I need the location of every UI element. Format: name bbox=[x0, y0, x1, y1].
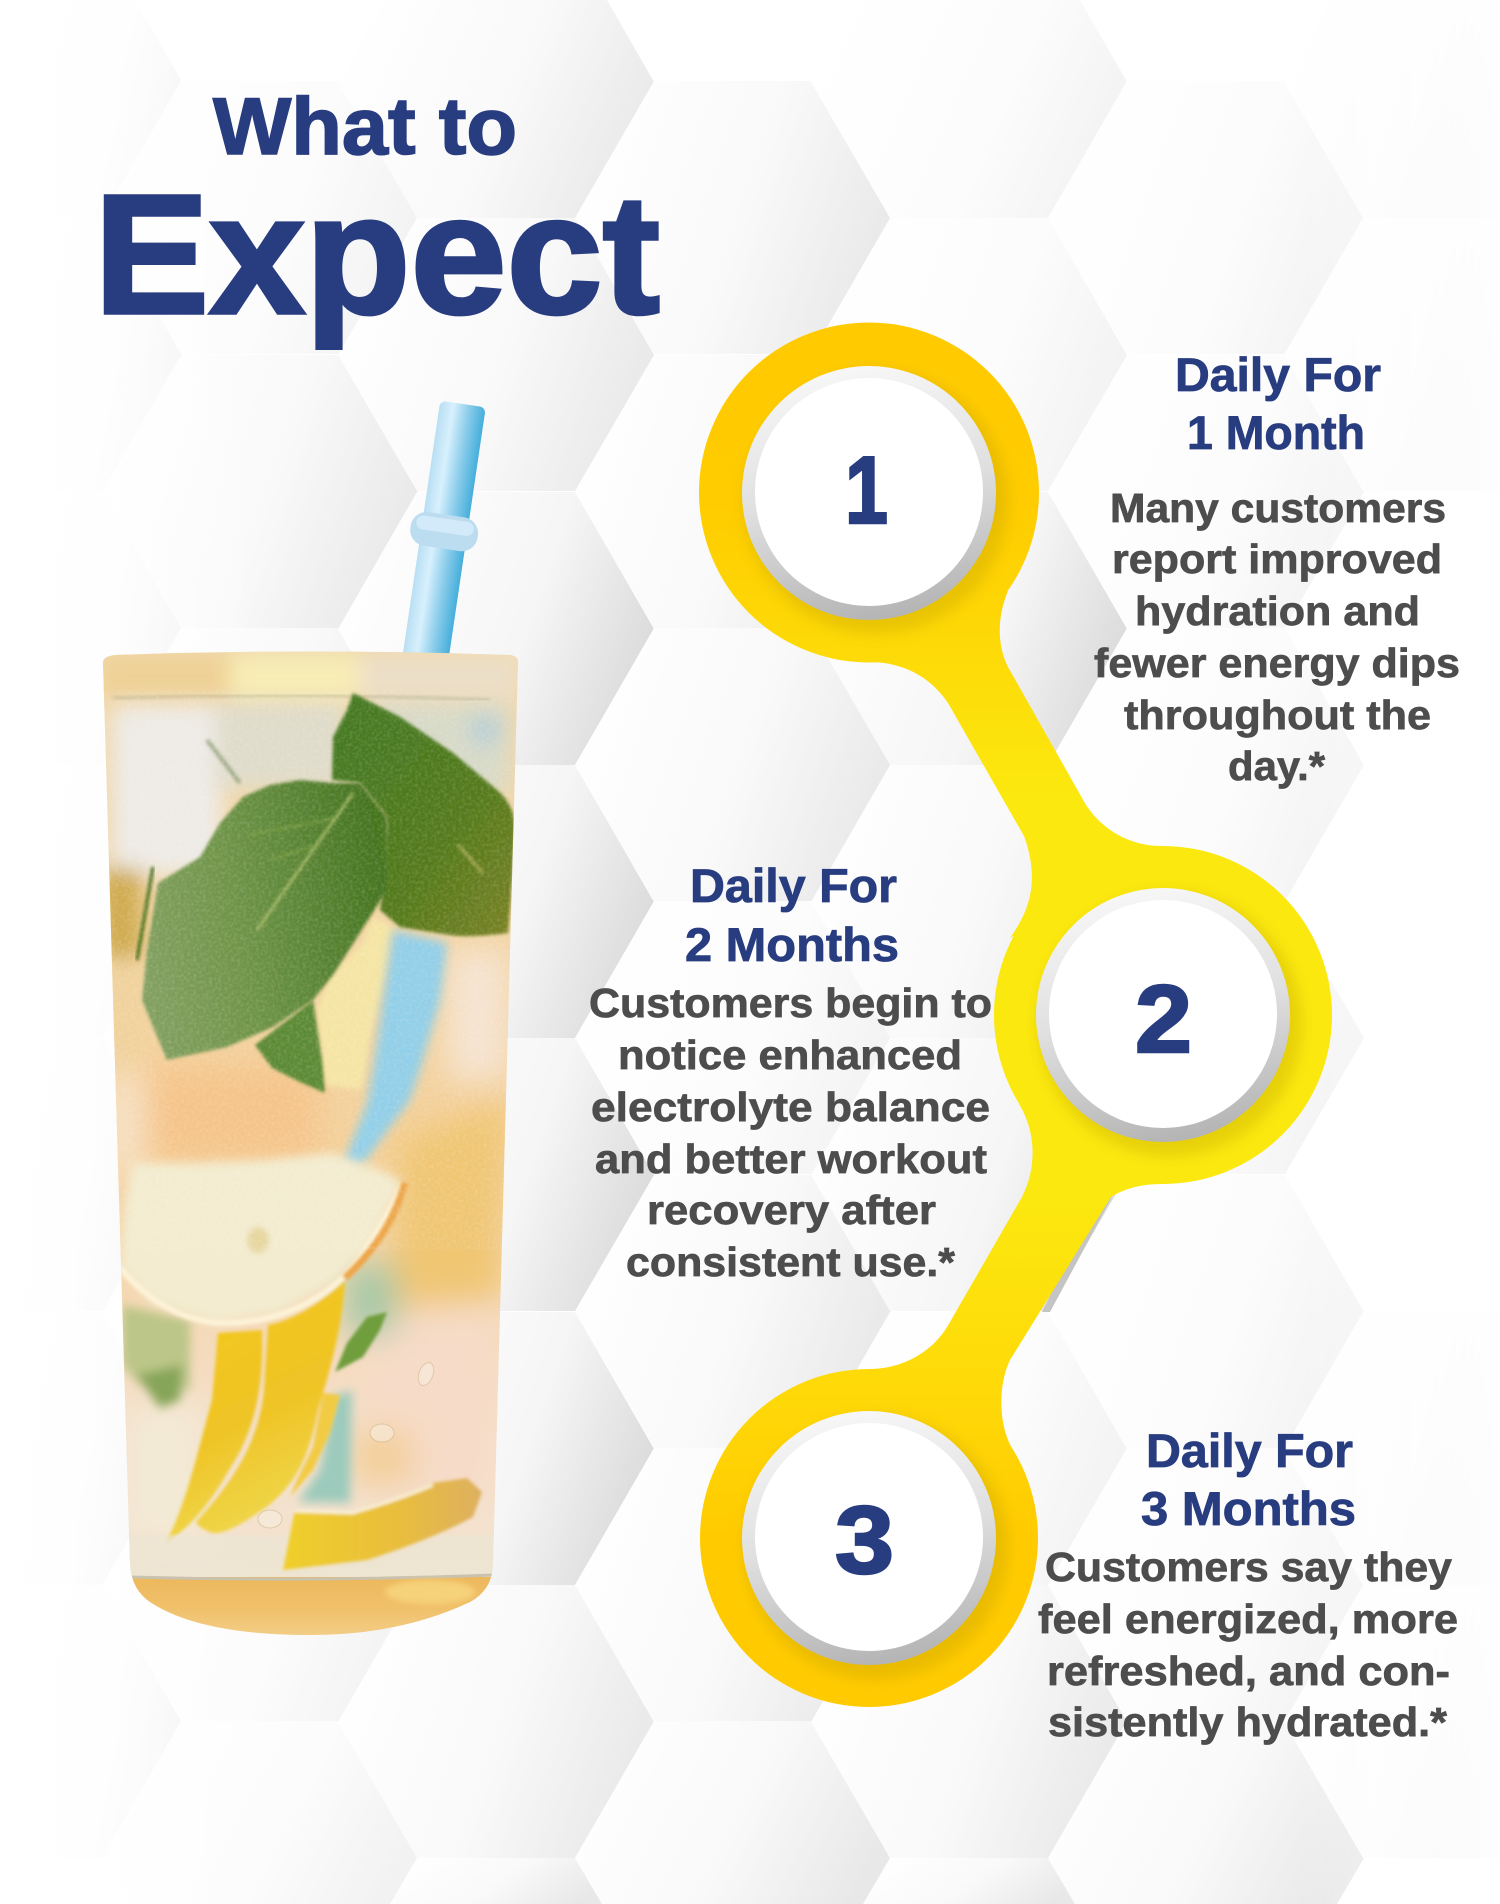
mint stem bbox=[137, 867, 153, 960]
thin liquid line bbox=[113, 695, 490, 700]
rim band and pale patches bbox=[100, 655, 520, 1070]
body: month 3 bbox=[1038, 1544, 1458, 1745]
mint leaf: right bbox=[332, 693, 515, 936]
lemon piece behind leaf bbox=[317, 917, 393, 1090]
glass bottom rim bbox=[164, 1533, 216, 1544]
body: month 2: recovery after bbox=[647, 1187, 936, 1233]
blue-green straw lower part bbox=[298, 1390, 352, 1503]
soft warm colour patches bbox=[108, 950, 509, 1540]
bottom lemon wedge bbox=[283, 1478, 482, 1570]
heading: daily for 1 month: Daily For bbox=[1175, 348, 1381, 401]
body: month 1: throughout the bbox=[1124, 692, 1431, 738]
icon: straw above glass bbox=[391, 399, 497, 668]
body: month 3: refreshed, and con- bbox=[1047, 1648, 1450, 1694]
body: month 2 bbox=[589, 980, 992, 1285]
heading: daily for 3 months bbox=[1141, 1424, 1356, 1535]
body: month 3: Customers say they bbox=[1045, 1544, 1452, 1590]
body: month 1: Many customers bbox=[1110, 485, 1446, 531]
glass base with liquid refraction bbox=[132, 1577, 491, 1635]
step 1 circle bbox=[742, 366, 1008, 634]
body: month 1: hydration and bbox=[1135, 588, 1420, 634]
body: month 3: sistently hydrated.* bbox=[1048, 1699, 1447, 1745]
body: month 2: notice enhanced bbox=[618, 1032, 962, 1078]
title bbox=[94, 82, 660, 350]
lemon slice in glass bbox=[120, 1153, 405, 1323]
heading: daily for 2 months: Daily For bbox=[690, 859, 897, 912]
condensation texture bbox=[100, 690, 520, 1250]
number 3: 3 bbox=[835, 1487, 894, 1594]
heading: daily for 1 month: 1 Month bbox=[1187, 406, 1365, 459]
green leaf lower left bbox=[122, 1305, 190, 1408]
body: month 2: electrolyte balance bbox=[591, 1084, 990, 1130]
heading: daily for 3 months: 3 Months bbox=[1141, 1482, 1356, 1535]
small green leaf bbox=[335, 1312, 387, 1372]
heading: daily for 3 months: Daily For bbox=[1146, 1424, 1353, 1477]
body: month 1: fewer energy dips bbox=[1094, 640, 1460, 686]
text block: daily for 1 month bbox=[1094, 348, 1460, 789]
chain connector: three linked yellow rings bbox=[699, 322, 1332, 1707]
title line: What to: What to bbox=[213, 82, 517, 172]
body: month 1: report improved bbox=[1112, 536, 1442, 582]
straw seen through the drink bbox=[343, 930, 447, 1165]
heading: daily for 2 months bbox=[685, 859, 899, 971]
connector body bbox=[699, 322, 1332, 1707]
body: month 1 bbox=[1094, 485, 1460, 789]
body: month 3: feel energized, more bbox=[1038, 1596, 1458, 1642]
mint leaf: left bbox=[142, 780, 387, 1060]
mint sprig bbox=[207, 740, 240, 783]
heading: daily for 1 month bbox=[1175, 348, 1381, 459]
step 3 circle bbox=[742, 1411, 1008, 1679]
number 1: 1 bbox=[845, 437, 888, 544]
heading: daily for 2 months: 2 Months bbox=[685, 918, 899, 971]
mint leaf: lower tip bbox=[255, 1000, 325, 1093]
number 2: 2 bbox=[1135, 966, 1192, 1073]
text block: daily for 2 months bbox=[589, 859, 992, 1285]
body: month 2: Customers begin to bbox=[589, 980, 992, 1026]
connector cast shadow bbox=[1042, 1195, 1112, 1312]
body: month 1: day.* bbox=[1228, 743, 1325, 789]
text block: daily for 3 months bbox=[1038, 1424, 1458, 1745]
mint leaf veins bbox=[250, 793, 483, 930]
body: month 2: and better workout bbox=[595, 1136, 987, 1182]
body: month 2: consistent use.* bbox=[626, 1239, 955, 1285]
water droplets bbox=[258, 1360, 437, 1528]
title line: Expect: Expect bbox=[94, 160, 660, 350]
lemon peels bbox=[165, 1280, 345, 1543]
illustration: iced lemon and mint drink in a glass bbox=[100, 648, 520, 1638]
step 2 circle bbox=[1036, 888, 1302, 1156]
